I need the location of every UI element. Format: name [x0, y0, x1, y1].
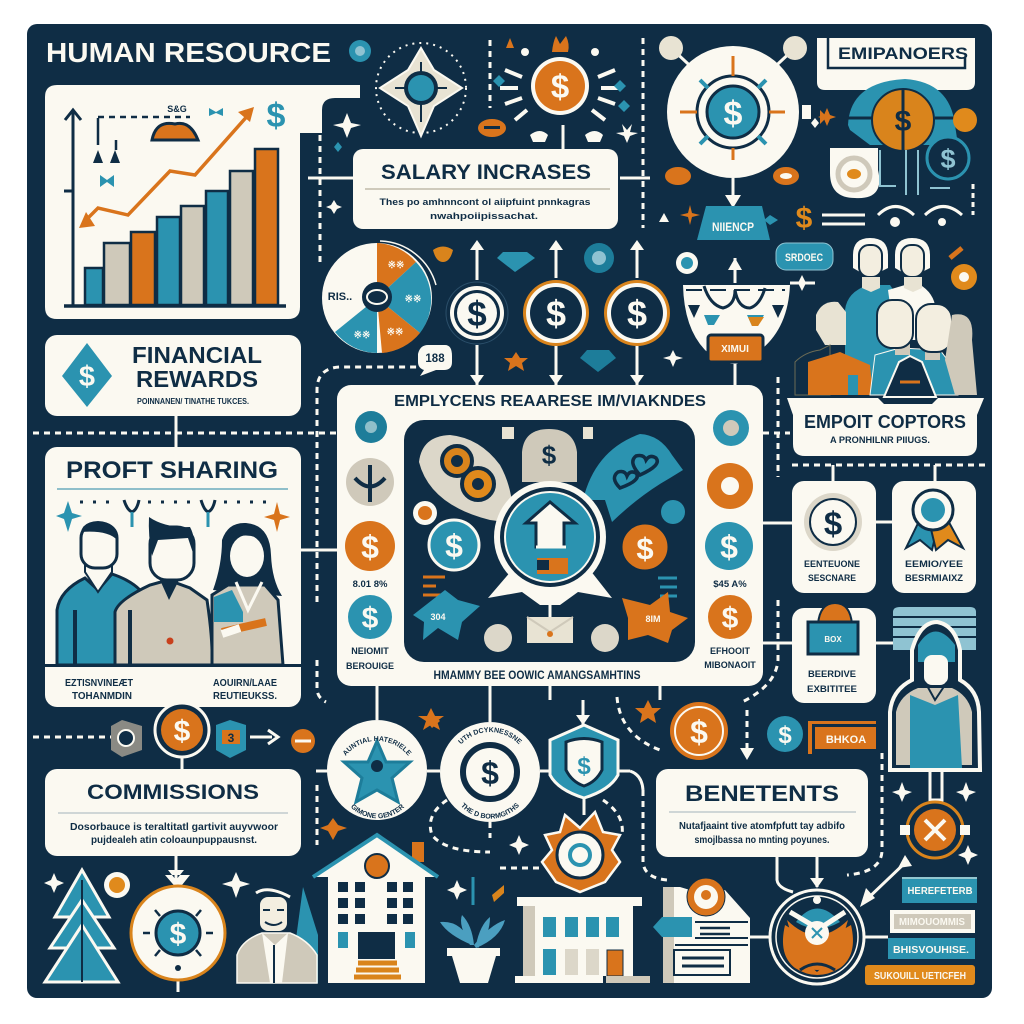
side icons right: $ — [720, 529, 738, 565]
side icons left: NEIOMIT — [351, 646, 389, 656]
icon: helmet and gauges — [818, 79, 977, 227]
card: executive — [792, 481, 876, 593]
tag 2: MIMOUOMMIS — [899, 917, 965, 928]
card: executive: SESCNARE — [808, 573, 856, 583]
coin: orange — [622, 524, 668, 570]
side icons left: $ — [361, 529, 379, 565]
coin 1 — [446, 282, 508, 344]
card: beerdive: EXBITITEE — [807, 684, 857, 694]
chart: pie: ※※ — [354, 330, 370, 341]
icons: dollar tag row: BHKOA — [826, 734, 866, 746]
badge: niiencp: NIIENCP — [712, 220, 754, 234]
card: beerdive: BEERDIVE — [808, 669, 856, 679]
bubble: hearts — [502, 427, 683, 522]
badge: srdoec — [776, 243, 833, 270]
panel: employees rewards centre: HMAMMY BEE OOWIC AMANGSAMHTINS — [434, 670, 641, 682]
centre emblem — [494, 481, 606, 593]
icon: orange coin with rays — [478, 36, 638, 143]
coin: orange: $ — [636, 531, 654, 566]
icon: star badge: GIMONE GENTER — [352, 804, 404, 818]
panel: employers label: EMIPANOERS — [838, 44, 968, 63]
coin: teal — [429, 520, 479, 570]
panel: profit sharing: PROFT SHARING — [66, 457, 278, 484]
chart: pie — [322, 241, 436, 353]
side icons left: 8.01 8% — [353, 579, 388, 590]
panel: profit sharing: EZTISNVINEÆT — [65, 678, 133, 689]
panel: employers label — [817, 38, 975, 90]
panel: empoit coptors: EMPOIT COPTORS — [804, 412, 966, 432]
icons: small sparkles — [326, 113, 361, 214]
side icons left: $ — [362, 602, 379, 635]
ribbons and stars: 8IM — [645, 614, 661, 624]
ribbons and stars: 304 — [430, 612, 446, 622]
icon: target coin — [131, 872, 250, 980]
panel: growth bar chart: $ — [267, 97, 286, 135]
coin 2 — [523, 280, 589, 346]
icon: star badge: AUNTIAL HATERIELE — [343, 736, 412, 756]
icon: orange coin with rays: $ — [551, 68, 569, 105]
icon: tree — [44, 870, 130, 982]
panel: salary increases: SALARY INCRASES — [381, 161, 591, 184]
coin 3: $ — [627, 293, 647, 334]
panel: growth bar chart — [45, 85, 360, 319]
icon: large top coin: $ — [724, 95, 743, 133]
panel: growth bar chart: S&G — [167, 104, 187, 114]
icon: dollar badge — [440, 722, 540, 822]
side icons right: $45 A% — [713, 579, 747, 590]
panel: commissions: COMMISSIONS — [87, 781, 259, 804]
icon: document — [653, 878, 750, 983]
side icons left — [345, 411, 395, 671]
badge: srdoec: SRDOEC — [785, 252, 823, 264]
icons: dollar tag row: $ — [778, 722, 792, 749]
icon: large top coin — [659, 36, 832, 185]
coin 3 — [604, 280, 670, 346]
callout: 188: 188 — [425, 353, 445, 365]
panel: profit sharing: TOHANMDIN — [72, 691, 132, 702]
ribbons behind emblem — [488, 570, 612, 605]
icons: dollar tag row — [320, 700, 876, 840]
icon: helmet and gauges: $ — [940, 144, 956, 174]
card: employee ribbon: EEMIO/YEE — [905, 559, 963, 569]
people group — [795, 238, 977, 397]
icon: dollar badge: THE D BORMGITHS — [462, 802, 519, 819]
icons: coin row left: $ — [174, 715, 191, 748]
icon: small teal chip — [661, 500, 685, 524]
tag 3: BHISVOUHISE. — [893, 945, 969, 956]
panel: empoit coptors — [787, 398, 984, 456]
panel: benefits: Nutafjaaint tive atomfpfutt tay adbifo — [679, 821, 845, 832]
tag 1: HEREFETERB — [908, 886, 972, 897]
panel: benefits: smojlbassa no mnting poyunes. — [694, 835, 830, 846]
bubble: gears — [419, 435, 513, 523]
panel: employee group — [787, 238, 984, 456]
chart: pie: RIS.. — [328, 291, 352, 303]
icons: coin row left: 3 — [228, 731, 235, 745]
chart: pie: ※※ — [387, 327, 403, 338]
person: right woman — [212, 523, 283, 665]
panel: profit sharing — [45, 447, 301, 707]
card: employee ribbon — [892, 481, 976, 593]
panel: commissions: Dosorbauce is teraltitatl gartivit auyvwoor — [70, 822, 278, 833]
panel: employees rewards centre: EMPLYCENS REAARESE IM/VIAKNDES — [394, 393, 706, 410]
bubble: dollar — [522, 429, 577, 482]
coin: teal: $ — [445, 528, 463, 564]
icon: small sun — [413, 501, 437, 525]
icon: businessman — [237, 887, 318, 983]
figure: woman with striped board — [890, 607, 980, 800]
side icons right: EFHOOIT — [710, 646, 751, 656]
panel: salary increases — [353, 149, 618, 229]
icons: mid badges — [656, 202, 977, 291]
icons: coin row left — [111, 703, 315, 758]
icon: star badge — [327, 720, 427, 820]
panel: benefits — [656, 769, 868, 857]
card: beerdive — [792, 603, 876, 703]
icon: flame — [509, 812, 620, 892]
card: executive: $ — [824, 505, 842, 542]
icon: top compass — [376, 43, 466, 136]
icon: target coin: $ — [170, 918, 187, 951]
labels: stacked tags — [865, 877, 977, 985]
tag 4: SUKOUILL UETICFEH — [874, 971, 966, 982]
icon: orange gear ring — [892, 782, 978, 865]
badge: niiencp — [697, 206, 770, 240]
bubble: dollar: $ — [542, 440, 557, 470]
side icons right: MIBONAOIT — [704, 660, 756, 670]
title: HUMAN RESOURCE — [46, 37, 331, 68]
coin 1: $ — [467, 295, 487, 334]
card: employee ribbon: BESRMIAIXZ — [905, 573, 964, 583]
panel: financial rewards: REWARDS — [136, 366, 258, 392]
panel: salary increases: nwahpoiipissachat. — [430, 211, 538, 222]
panel: profit sharing: REUTIEUKSS. — [213, 691, 277, 702]
panel: salary increases: Thes po amhnncont ol aiipfuint pnnkagras — [380, 197, 590, 208]
icon: shield — [550, 725, 618, 815]
ribbons and stars — [413, 577, 688, 652]
icon: small title gear — [349, 40, 371, 62]
icon: diamond dollar: $ — [79, 361, 95, 393]
icon: shield: $ — [577, 753, 591, 780]
chart: pie: ※※ — [388, 260, 404, 271]
side icons right: $ — [722, 602, 739, 635]
icon: dollar badge: $ — [481, 755, 499, 791]
icon: dollar badge: UTH DCYKNESSNE — [458, 727, 522, 744]
callout: 188 — [418, 345, 452, 376]
card: executive: EENTEUONE — [804, 559, 860, 569]
panel: profit sharing: AOUIRN/LAAE — [213, 678, 277, 689]
icons: dollar tag row: $ — [690, 714, 708, 750]
icon: office building — [515, 897, 650, 983]
icon: plant pot — [440, 877, 505, 983]
icons: three dollar coins — [433, 243, 670, 372]
panel: financial rewards: POINNANEN/ TINATHE TUKCES. — [137, 397, 249, 406]
inner dark panel — [404, 420, 695, 662]
icon: house building — [313, 835, 438, 983]
panel: commissions: pujdealeh atin coloaunpuppausnst. — [91, 835, 257, 846]
card: beerdive: BOX — [824, 635, 842, 644]
panel: financial rewards: FINANCIAL — [132, 342, 262, 368]
icon: chandelier badge: XIMUI — [721, 344, 749, 355]
icon: helmet and gauges: $ — [895, 105, 912, 138]
panel: financial rewards — [45, 335, 301, 416]
chart: pie: ※※ — [405, 294, 421, 305]
person: center man — [115, 517, 212, 665]
panel: commissions — [45, 769, 301, 856]
person: left man — [57, 521, 140, 665]
icons: mid badges: $ — [796, 202, 813, 235]
icon: chandelier badge — [663, 283, 815, 367]
icon: bottom emblem — [770, 890, 864, 984]
panel: benefits: BENETENTS — [685, 781, 839, 806]
side icons right — [704, 410, 756, 670]
icon: diamond dollar — [62, 343, 112, 407]
coin 2: $ — [546, 293, 566, 334]
side icons left: BEROUIGE — [346, 661, 394, 671]
panel: employees rewards centre — [337, 385, 763, 686]
panel: empoit coptors: A PRONHILNR PIIUGS. — [830, 435, 930, 446]
